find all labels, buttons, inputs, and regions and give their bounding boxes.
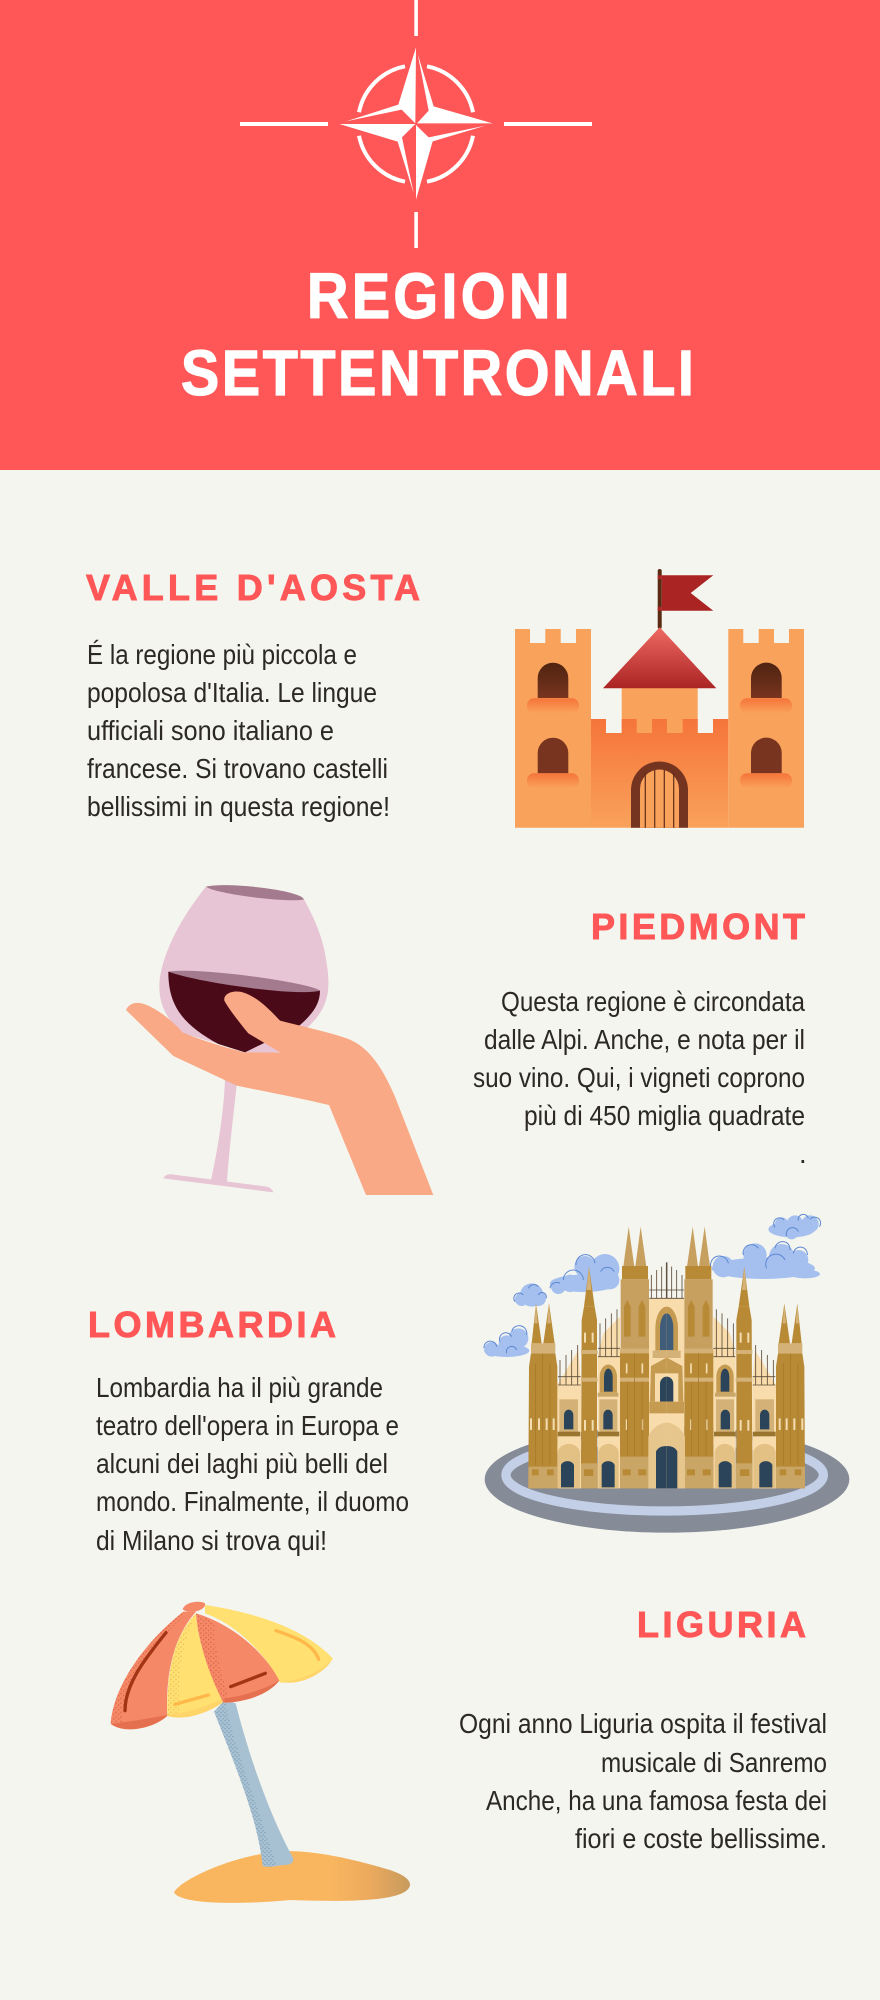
section: Liguria text xyxy=(459,1604,827,1854)
heading: Lombardia: LOMBARDIA xyxy=(88,1304,336,1345)
left tower xyxy=(515,629,591,828)
glass rim xyxy=(206,885,304,900)
heading: Piedmont: PIEDMONT xyxy=(591,906,805,947)
text block: Valle d'Aosta: francese. Si trovano castelli xyxy=(87,753,388,784)
glass stem and foot xyxy=(163,1078,273,1192)
side walls xyxy=(557,1317,620,1488)
castle flag xyxy=(658,569,713,629)
pinnacles xyxy=(558,1262,667,1385)
middle buttress xyxy=(581,1267,598,1488)
text block: Valle d'Aosta: ufficiali sono italiano e xyxy=(87,715,334,746)
text block: Lombardia: alcuni dei laghi più belli del xyxy=(96,1448,388,1479)
section: Piedmont text xyxy=(473,906,807,1169)
clouds xyxy=(484,1215,820,1357)
sand mound xyxy=(174,1851,410,1903)
icon: castle xyxy=(515,569,804,828)
text block: Piedmont: suo vino. Qui, i vigneti coprono xyxy=(473,1062,805,1093)
text block: Valle d'Aosta: popolosa d'Italia. Le lingue xyxy=(87,677,377,708)
umbrella canopy xyxy=(111,1602,333,1729)
hand xyxy=(126,991,433,1195)
text block: Lombardia xyxy=(96,1372,409,1556)
glass bowl xyxy=(159,887,328,1053)
text block: Liguria: Ogni anno Liguria ospita il festival xyxy=(459,1708,827,1739)
castle keep xyxy=(603,627,716,734)
text block: Valle d'Aosta xyxy=(87,639,390,822)
red wine xyxy=(168,971,320,1052)
section: Lombardia text xyxy=(88,1304,409,1556)
icon: compass rose xyxy=(240,0,592,248)
cathedral plaza xyxy=(485,1426,849,1533)
castle main wall xyxy=(591,719,728,828)
title: SETTENTRONALI xyxy=(181,337,694,409)
text block: Liguria: musicale di Sanremo xyxy=(601,1747,827,1778)
section: Valle d'Aosta text xyxy=(86,567,420,822)
cathedral facade xyxy=(528,1227,667,1488)
text block: Liguria: fiori e coste bellissime. xyxy=(575,1823,827,1854)
icon: beach umbrella xyxy=(111,1602,410,1903)
text block: Lombardia: Lombardia ha il più grande xyxy=(96,1372,383,1403)
outer tower xyxy=(528,1303,557,1488)
text block: Piedmont: . xyxy=(799,1138,807,1169)
banner background xyxy=(0,0,880,470)
heading: Liguria: LIGURIA xyxy=(637,1604,806,1645)
cathedral facade mirrored half xyxy=(666,1227,805,1488)
text block: Piedmont: più di 450 miglia quadrate xyxy=(524,1100,805,1131)
text block: Piedmont: Questa regione è circondata xyxy=(501,986,806,1017)
text block: Valle d'Aosta: É la regione più piccola e xyxy=(87,639,357,670)
cloud outlines xyxy=(484,1214,821,1353)
header banner xyxy=(0,0,880,470)
text block: Piedmont xyxy=(473,986,807,1169)
text block: Liguria: Anche, ha una famosa festa dei xyxy=(486,1785,827,1816)
central cream wall xyxy=(649,1298,667,1488)
text block: Piedmont: dalle Alpi. Anche, e nota per il xyxy=(484,1024,805,1055)
text block: Lombardia: di Milano si trova qui! xyxy=(96,1525,327,1556)
title xyxy=(181,260,694,409)
side windows and doors xyxy=(558,1365,619,1488)
icon: Milan cathedral xyxy=(484,1214,849,1533)
umbrella pole xyxy=(214,1700,293,1867)
text block: Liguria xyxy=(459,1708,827,1854)
right tower xyxy=(728,629,804,828)
icon: hand holding wine glass xyxy=(126,885,433,1195)
castle gate xyxy=(631,762,688,828)
inner tower xyxy=(620,1227,649,1488)
text block: Lombardia: mondo. Finalmente, il duomo xyxy=(96,1486,409,1517)
heading: Valle d'Aosta: VALLE D'AOSTA xyxy=(86,567,420,608)
text block: Valle d'Aosta: bellissimi in questa regione! xyxy=(87,791,390,822)
title: REGIONI xyxy=(307,260,570,332)
text block: Lombardia: teatro dell'opera in Europa e xyxy=(96,1410,399,1441)
central windows and portal xyxy=(648,1307,667,1488)
